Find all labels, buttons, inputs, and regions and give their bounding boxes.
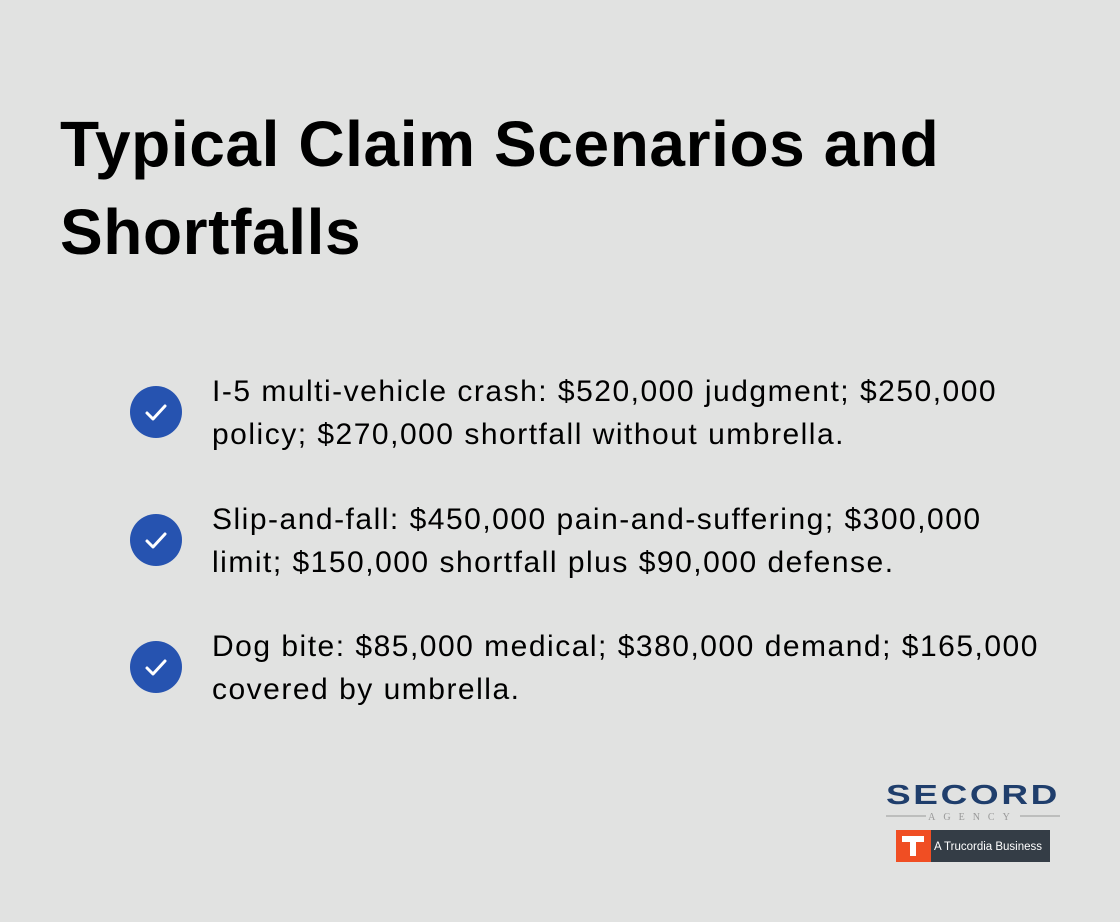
text 1 (212, 375, 997, 451)
title (60, 108, 939, 268)
logo: A Trucordia Business (934, 841, 1042, 853)
text 2: limit; $150,000 shortfall plus $90,000 defense. (212, 546, 895, 579)
title: Typical Claim Scenarios and (60, 108, 939, 180)
text 3: Dog bite: $85,000 medical; $380,000 demand; $165,000 (212, 630, 1039, 663)
text 1: policy; $270,000 shortfall without umbrella. (212, 418, 845, 451)
text 2: Slip-and-fall: $450,000 pain-and-suffering; $300,000 (212, 503, 982, 536)
text 1: I-5 multi-vehicle crash: $520,000 judgment; $250,000 (212, 375, 997, 408)
logo (886, 780, 1060, 862)
item 3 (130, 630, 1039, 706)
icon: check (130, 641, 182, 693)
text 3 (212, 630, 1039, 706)
text 2 (212, 503, 982, 579)
item 1 (130, 375, 997, 451)
text 3: covered by umbrella. (212, 673, 520, 706)
title: Shortfalls (60, 196, 361, 268)
icon: check (130, 386, 182, 438)
item 2 (130, 503, 982, 579)
logo: AGENCY (928, 812, 1018, 823)
icon: check (130, 514, 182, 566)
